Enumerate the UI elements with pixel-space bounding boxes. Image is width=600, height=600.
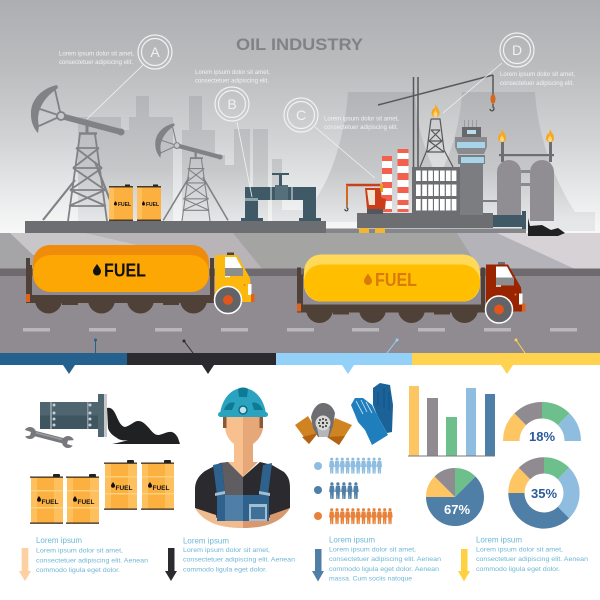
text block column 2: commodo ligula eget dolor. [183,566,267,574]
callout A: Lorem ipsum dolor sit amet, [59,50,134,58]
pumpjack A [31,85,124,221]
oil spill upper [528,218,565,236]
text block column 1: consectetuer adipiscing elit. Aenean [36,558,148,564]
pin markers [94,338,525,353]
text block column 4: Lorem ipsum dolor sit amet, [476,546,563,554]
orange fuel truck [26,245,254,314]
text block column 4: Lorem ipsum [476,536,522,544]
light blue row [314,458,382,474]
text block column 3: commodo ligula eget dolor. Aenean [329,566,439,573]
pie chart 67% [426,468,484,526]
blue row [314,482,359,499]
section colour bar [0,353,600,374]
icon: gas mask [295,403,352,445]
sky background [0,0,600,233]
text block column 2: Lorem ipsum dolor sit amet, [183,547,270,554]
title: OIL INDUSTRY [236,35,364,54]
lower fuel barrels: FUEL [152,485,170,492]
crane tower with hook [378,75,496,167]
half donut chart 18%: 18% [529,429,555,444]
arrow: peach [19,548,31,581]
valve pipe [241,173,321,221]
callout C: Lorem ipsum dolor sit amet, [324,116,399,122]
arrow: black [165,548,177,581]
callout C [284,98,399,178]
text block column 4 [476,536,588,573]
callout C: C [296,107,306,123]
flare tower [420,104,453,167]
road dashes [23,328,577,332]
lower fuel barrels [30,460,174,524]
orange row [314,508,393,524]
pumpjack B [155,123,228,221]
arrow: yellow [458,549,470,582]
text block column 3: Lorem ipsum dolor sit amet, [329,546,416,554]
pictogram rows of people [314,458,393,524]
bar chart [408,386,495,456]
half donut chart 18% [503,402,581,444]
fuel barrels upper: FUEL [146,202,159,208]
chimneys [382,149,408,212]
storage tanks with flares [483,129,554,229]
text block column 1: commodo ligula eget dolor. [36,567,120,574]
lower fuel barrels: FUEL [42,499,58,506]
callout B [195,69,270,197]
lower fuel barrels: FUEL [78,499,94,506]
donut chart 35%: 35% [531,486,557,501]
road surface [0,233,600,353]
refinery building [412,167,460,218]
text block column 2 [183,536,295,574]
city silhouette [78,96,307,222]
text block column 2: consectetuer adipiscing elit. Aenean [183,556,295,564]
control tower [455,120,487,215]
fuel barrels upper [109,184,161,221]
callout D: D [512,42,522,58]
cooling towers [310,92,595,231]
callout D [443,33,575,113]
text block column 2: Lorem ipsum [183,536,229,546]
callout D: Lorem ipsum dolor sit amet, [500,71,575,78]
pie chart 67%: 67% [444,502,470,517]
left platform [25,219,526,233]
callout A: consectetuer adipiscing elit. [59,59,133,66]
lower fuel barrels: FUEL [116,485,132,492]
icon: leaking pipe [40,394,180,444]
text block column 4: consectetuer adipiscing elit. Aenean [476,556,588,563]
callout B: Lorem ipsum dolor sit amet, [195,69,270,76]
icon: gloves [351,383,393,445]
yellow fuel truck [297,254,526,323]
donut chart 35% [508,457,580,529]
callout B: consectetuer adipiscing elit. [195,78,269,84]
icon: wrench [22,427,77,448]
crane truck [345,184,386,214]
text block column 1 [36,536,148,574]
callout C: consectetuer adipiscing elit. [324,124,398,131]
text block column 4: commodo ligula eget dolor. [476,566,560,573]
yellow fuel truck: FUEL [375,270,417,290]
callout D: consectetuer adipiscing elit. [500,80,574,87]
text block column 3: Lorem ipsum [329,536,375,544]
text block column 1: Lorem ipsum dolor sit amet, [36,548,123,554]
worker figure [195,388,290,528]
right platform [357,213,493,233]
arrow: blue [312,549,324,582]
orange fuel truck: FUEL [104,260,146,280]
callout B: B [227,96,237,112]
callout A [59,35,172,119]
text block column 3: massa. Cum sociis natoque [329,576,412,582]
text block column 3 [329,536,441,582]
text block column 1: Lorem ipsum [36,536,82,545]
fuel barrels upper: FUEL [118,202,131,208]
text block column 3: consectetuer adipiscing elit. Aenean [329,556,441,563]
callout A: A [150,44,160,60]
